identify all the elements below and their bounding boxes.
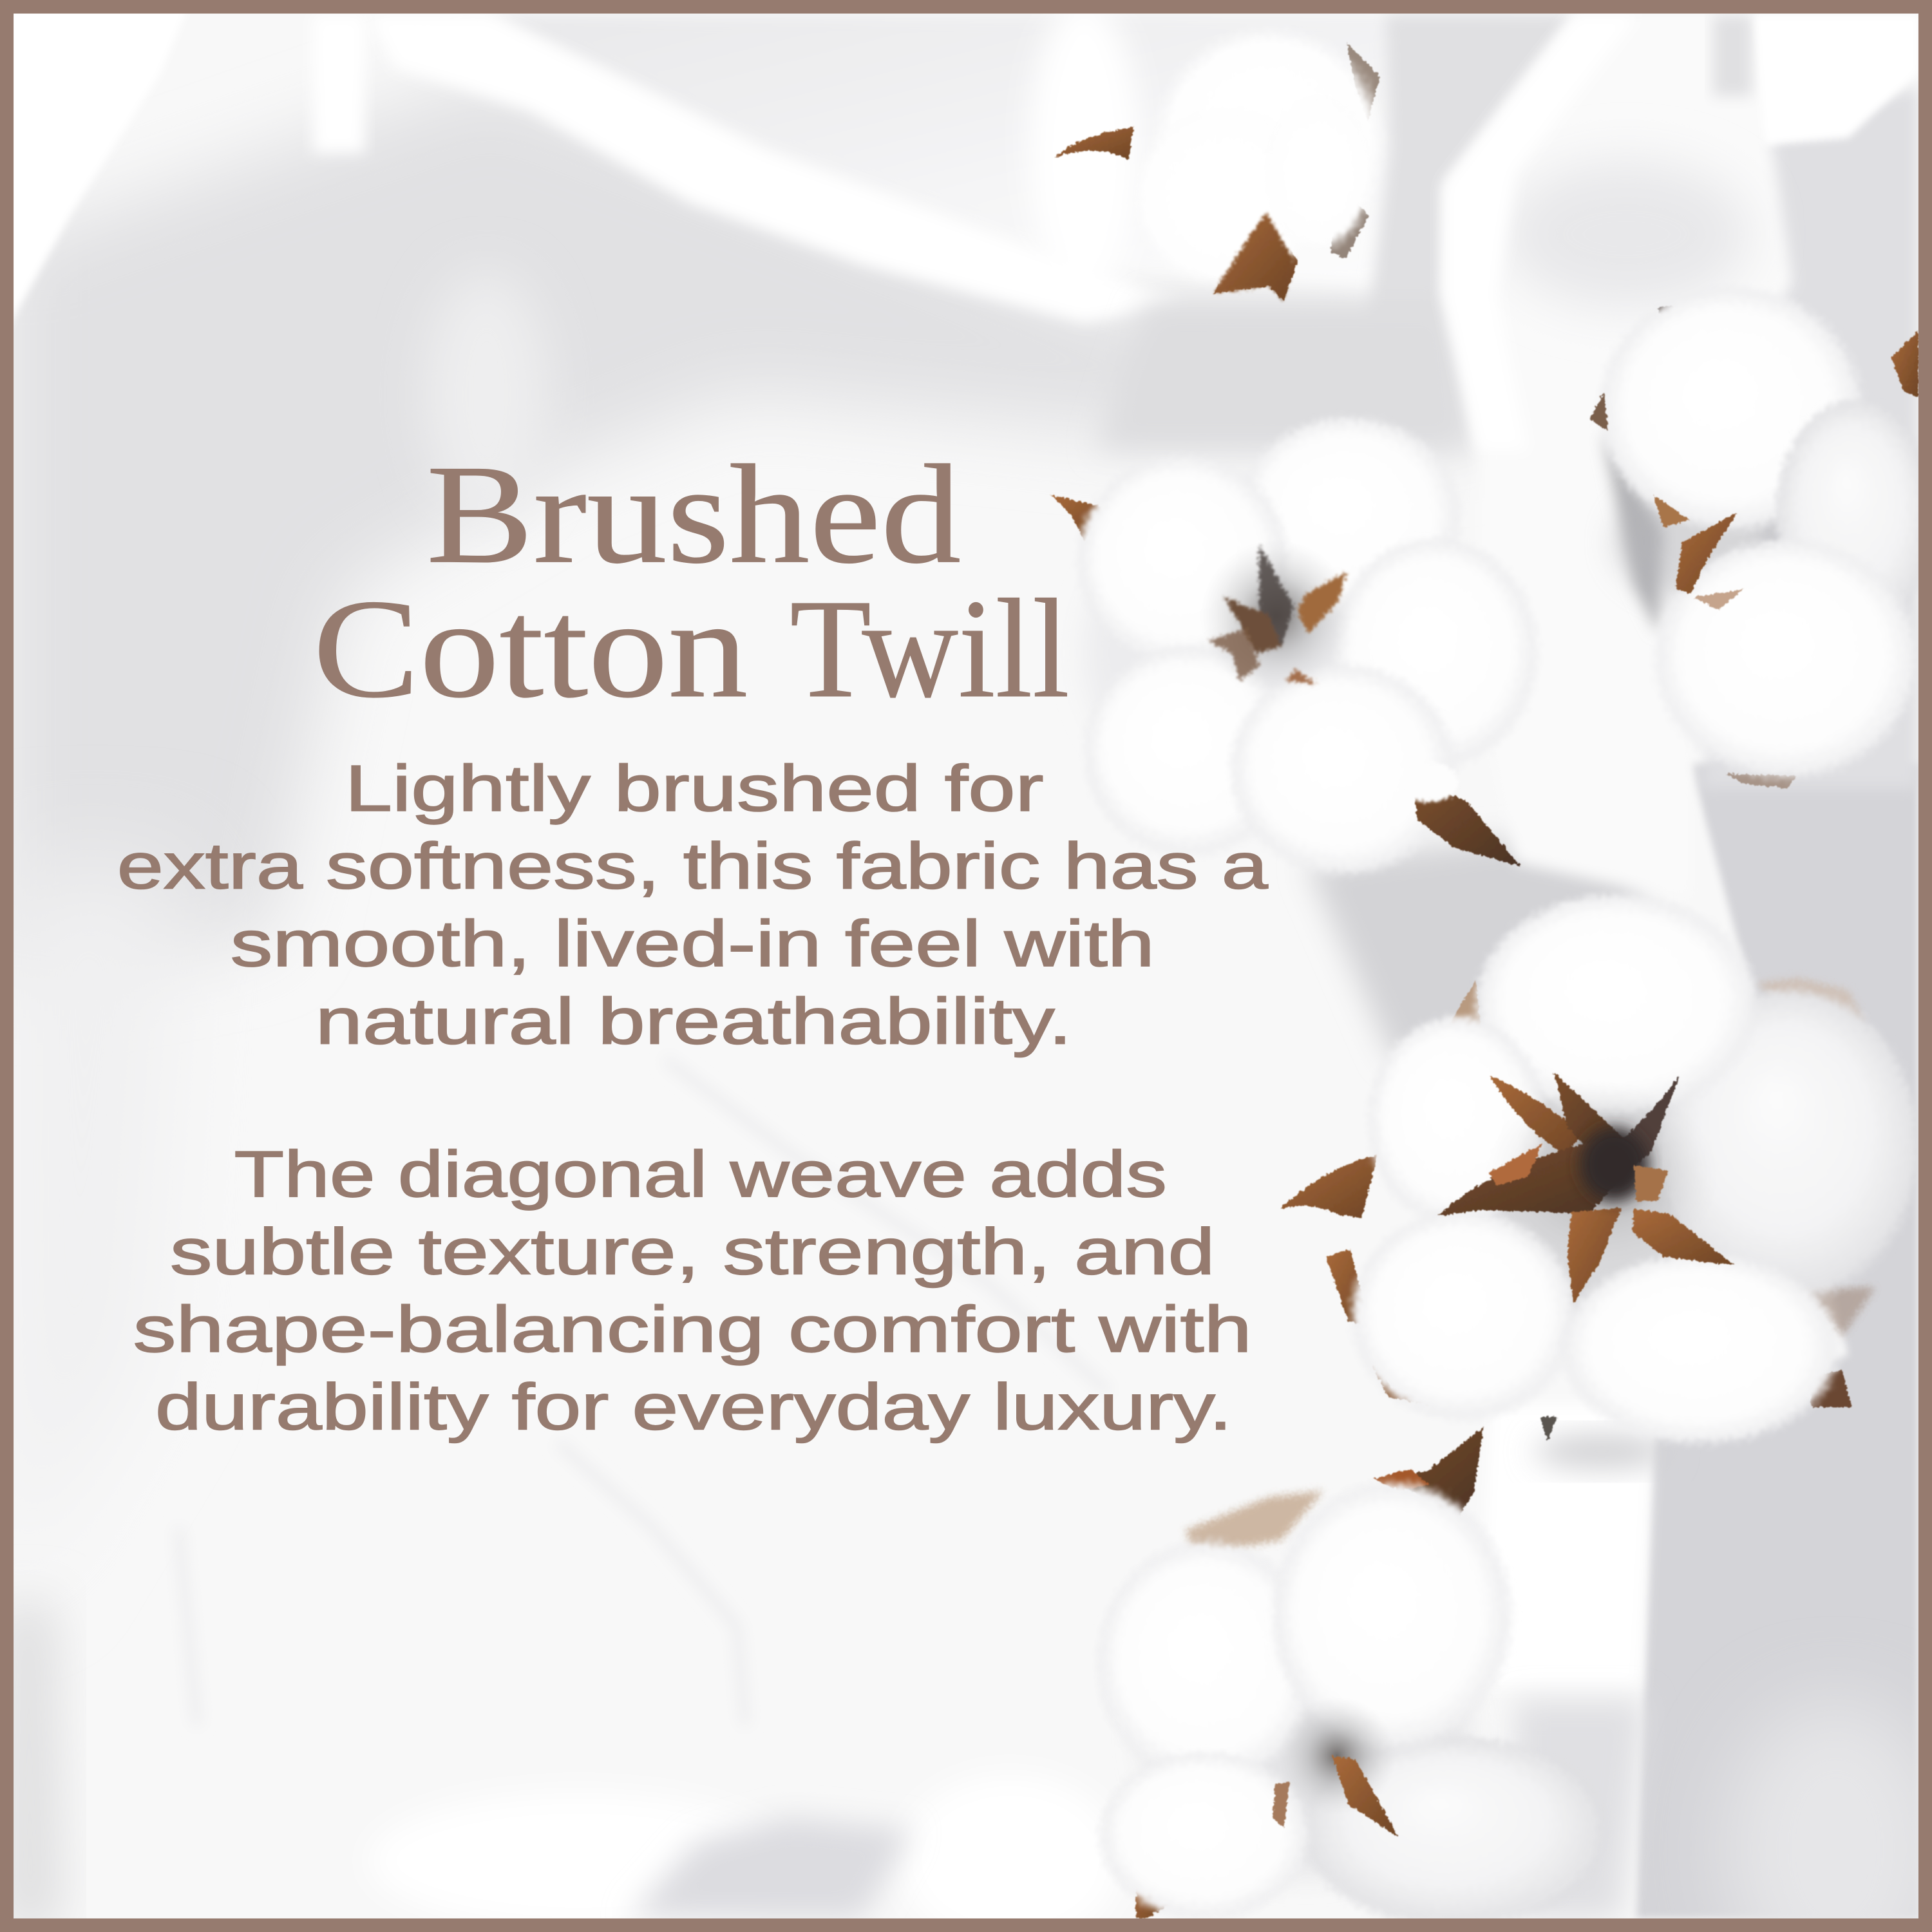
text block: weave description: durability for everyday luxury. <box>155 1370 1232 1443</box>
cotton boll: large <box>1280 891 1925 1448</box>
text block: weave description: subtle texture, strength, and <box>170 1215 1215 1288</box>
cotton boll: upper right <box>1589 283 1932 788</box>
boll leaves: top <box>1054 43 1380 301</box>
text block: softness description: extra softness, this fabric has a <box>117 829 1269 902</box>
boll leaves: upper right inner <box>1589 392 1743 610</box>
title: Brushed Cotton Twill <box>313 435 1070 727</box>
text block: weave description <box>133 1138 1252 1443</box>
title: Brushed Cotton Twill: Cotton <box>313 570 748 727</box>
text block: softness description: Lightly brushed for <box>345 752 1044 825</box>
boll leaves: upper right outer <box>1657 305 1918 788</box>
text block: softness description: smooth, lived-in feel with <box>231 907 1155 980</box>
boll star: middle <box>1208 545 1347 685</box>
boll outer leaves: bottom <box>1136 1427 1484 1918</box>
boll star: bottom <box>1273 1756 1399 1837</box>
text block: softness description <box>117 752 1269 1058</box>
title: Brushed Cotton Twill: Brushed <box>426 435 961 592</box>
cotton boll: bottom <box>1094 1427 1609 1931</box>
fabric wrinkles <box>178 1059 1109 1725</box>
cotton boll: middle <box>1051 414 1541 878</box>
text block: weave description: The diagonal weave adds <box>234 1138 1167 1211</box>
text block: softness description: natural breathability. <box>316 985 1072 1058</box>
boll star: large <box>1438 1072 1735 1303</box>
boll outer leaves: large <box>1280 978 1875 1442</box>
text block: weave description: shape-balancing comfort with <box>133 1293 1252 1366</box>
cotton boll: top <box>1054 24 1387 301</box>
title: Brushed Cotton Twill: Twill <box>790 570 1070 727</box>
